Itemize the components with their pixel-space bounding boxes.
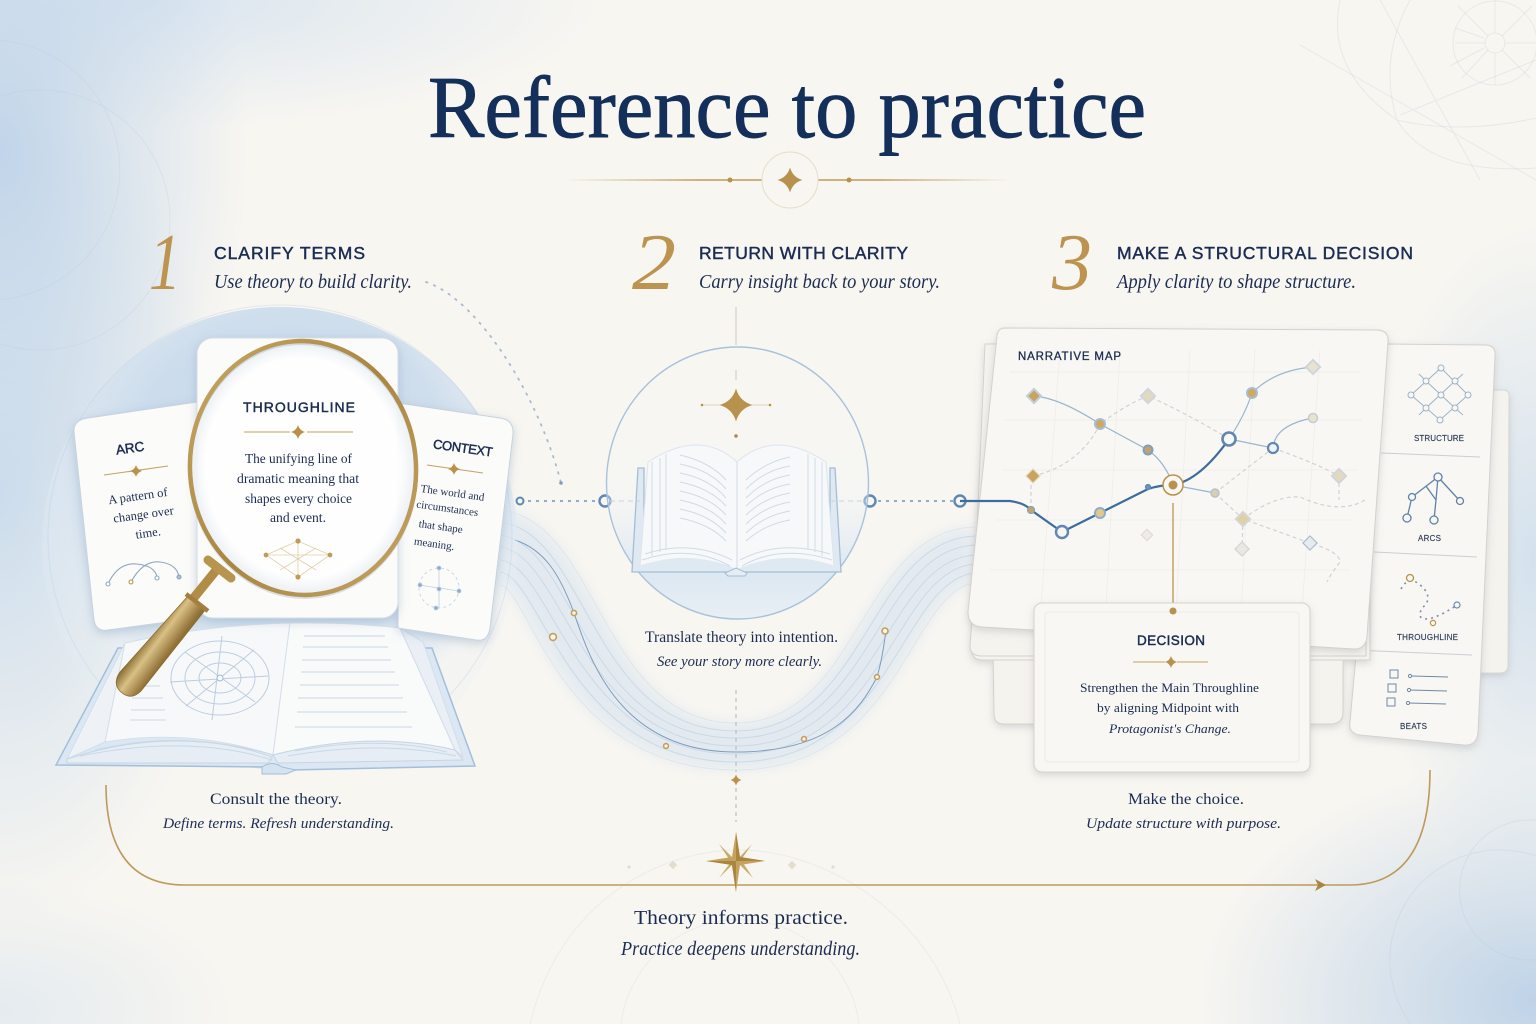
magnifier lens: [181, 333, 425, 603]
halo circle: [42, 305, 518, 769]
card: throughline: dramatic meaning that: [237, 471, 359, 486]
icon: arcs: [106, 562, 181, 586]
icon: compass star: [627, 832, 835, 892]
step 2 heading: 2: [632, 219, 676, 307]
icon: arcs tree: [1403, 473, 1464, 524]
stacked sheets behind map: [970, 344, 1370, 724]
primary blue paths: [1034, 367, 1313, 493]
decision card: Strengthen the Main Throughline: [1080, 680, 1259, 695]
card: arc: [74, 402, 197, 630]
step 2 heading: RETURN WITH CLARITY: [699, 243, 908, 263]
side reference panel: ARCS: [1418, 534, 1441, 543]
globe circle: [606, 347, 868, 619]
card: arc: change over: [112, 503, 175, 526]
main throughline: [960, 439, 1229, 532]
step 2 caption: Translate theory into intention.: [645, 629, 838, 646]
title ornament: [565, 152, 1012, 208]
step 3 heading: MAKE A STRUCTURAL DECISION: [1117, 243, 1413, 263]
side reference panel: THROUGHLINE: [1397, 633, 1458, 642]
flow path gold markers: [550, 610, 888, 748]
flowing band between steps: [500, 510, 975, 770]
title: Reference to practice: [428, 60, 1146, 157]
side reference sheet behind: [1470, 390, 1509, 673]
decision target node: [1163, 475, 1183, 495]
step 2 caption: See your story more clearly.: [657, 654, 822, 670]
step 1 heading: 1: [149, 219, 181, 307]
closing statement: Theory informs practice.: [634, 908, 848, 929]
card: arc: time.: [135, 524, 162, 542]
card: throughline: The unifying line of: [245, 451, 352, 466]
icon: structure lattice: [1408, 365, 1471, 423]
card: context: meaning.: [413, 536, 455, 553]
panel: return with clarity illustration: [606, 307, 868, 619]
card: context: The world and: [420, 483, 486, 504]
step 3 caption: Make the choice.: [1128, 791, 1244, 808]
step 3 heading: 3: [1051, 219, 1092, 307]
open reference book: [56, 623, 475, 774]
card: arc: ARC: [115, 439, 146, 458]
card: throughline: shapes every choice: [245, 491, 352, 506]
narrative map card: [960, 328, 1388, 649]
side reference panel: BEATS: [1400, 722, 1427, 731]
secondary paths: [1031, 396, 1365, 582]
step 1 caption: Consult the theory.: [210, 791, 342, 808]
icon: network circle: [418, 566, 461, 610]
step 3 heading: Apply clarity to shape structure.: [1115, 272, 1356, 293]
side reference panel: STRUCTURE: [1414, 434, 1464, 443]
step 2 heading: Carry insight back to your story.: [699, 272, 940, 293]
decision card: DECISION: [1137, 633, 1205, 648]
connector nodes line: [516, 496, 966, 506]
card: throughline: [181, 333, 425, 618]
step 2 caption: [645, 629, 838, 670]
decision card: by aligning Midpoint with: [1097, 700, 1240, 715]
map nodes: [1026, 360, 1346, 556]
step 2 heading: [632, 219, 940, 307]
card: arc: A pattern of: [107, 485, 169, 507]
card: context: circumstances: [416, 499, 479, 519]
step 1 heading: CLARIFY TERMS: [214, 243, 365, 263]
step 3 heading: [1051, 219, 1413, 307]
narrative map card: NARRATIVE MAP: [1018, 351, 1121, 363]
icon: gold network: [264, 538, 332, 580]
card: throughline: and event.: [270, 510, 326, 525]
step 1 heading: [149, 219, 412, 307]
icon: beats checklist: [1387, 670, 1448, 706]
card: context: that shape: [418, 518, 464, 536]
panel: structural decision illustration: [960, 328, 1509, 772]
step 3 caption: Update structure with purpose.: [1086, 816, 1281, 832]
step 1 heading: Use theory to build clarity.: [214, 272, 412, 293]
card: throughline: THROUGHLINE: [243, 399, 355, 415]
step 1 caption: Define terms. Refresh understanding.: [162, 816, 394, 832]
step 1 caption: [162, 791, 394, 832]
closing statement: [620, 908, 860, 960]
card: context: CONTEXT: [432, 436, 494, 460]
icon: gold star: [701, 388, 771, 438]
icon: book compass: [170, 636, 269, 720]
card: context: [398, 403, 513, 640]
magnifying glass: [116, 333, 425, 696]
icon: throughline path: [1401, 574, 1460, 626]
feedback loop arrow: [106, 690, 1430, 891]
decision connector: [1172, 503, 1174, 612]
open book: [632, 445, 841, 576]
panel: clarify terms illustration: [42, 305, 518, 774]
decision card: [1034, 603, 1310, 772]
dotted link from step 1 heading: [426, 282, 563, 485]
side reference panel: [1350, 344, 1495, 745]
step 3 caption: [1086, 791, 1281, 832]
decision card: Protagonist's Change.: [1108, 721, 1231, 736]
closing statement: Practice deepens understanding.: [620, 939, 860, 960]
map grid: [990, 350, 1362, 640]
